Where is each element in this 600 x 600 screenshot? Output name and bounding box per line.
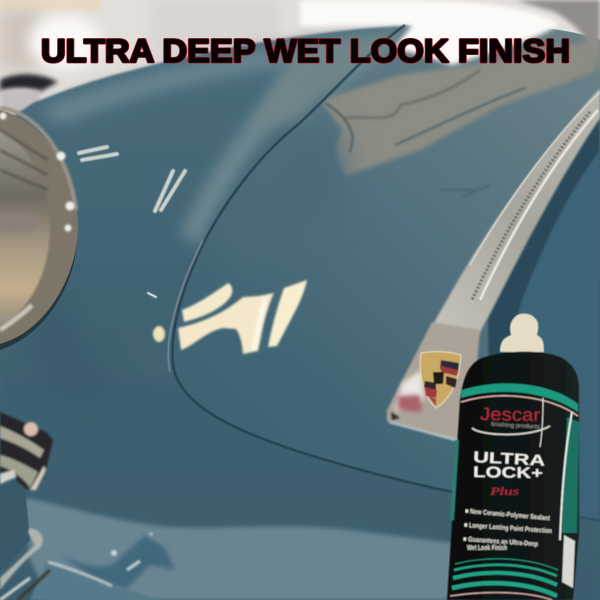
front hood panel [172,23,600,520]
product bullets: ■ Guarantees an Ultra-Deep [463,536,538,548]
product bottle: Plus [490,484,519,498]
bottle cap [500,314,544,352]
bottle body [447,352,579,600]
product bottle [447,314,579,600]
title: ULTRA DEEP WET LOOK FINISH [41,33,570,69]
jescar logo text: Jescar [480,404,540,425]
pink pinstripe [461,396,578,416]
porsche crest badge [420,352,461,408]
background: blurred garage [0,0,600,130]
car body: shading on fender [30,42,330,400]
green top band [461,383,578,412]
hood seam line [172,25,600,520]
top white sky reflection on hood [300,0,560,65]
hood reflections [215,28,595,260]
lower body crease and light band [24,498,470,600]
sunlight reflection on hood [178,280,307,354]
highlights on fender [79,147,185,297]
bumper corner and chrome trim [0,478,160,600]
product bullets: Wet Look Finish [467,545,507,552]
product bullets: ■ New Ceramic-Polymer Sealant [465,508,551,522]
product bottle: finishing products [491,422,540,431]
product bullets: ■ Longer Lasting Paint Protection [464,522,552,535]
chrome trim strip [430,88,600,350]
product bullets [463,508,552,552]
left side stripes [452,440,457,520]
product name: ULTRA [473,449,546,470]
headlight [0,106,78,350]
right side stripes [562,417,579,533]
small warm highlight [153,326,165,342]
title: ULTRA DEEP WET LOOK FINISH [41,33,570,69]
lower green stripes [450,559,558,600]
right fender panel beyond chrome trim [488,118,600,520]
dark top-right trim [515,0,600,75]
product bottle: LOCK+ [473,464,543,482]
crest base chrome [387,322,480,445]
turn signal / grille [0,412,53,490]
